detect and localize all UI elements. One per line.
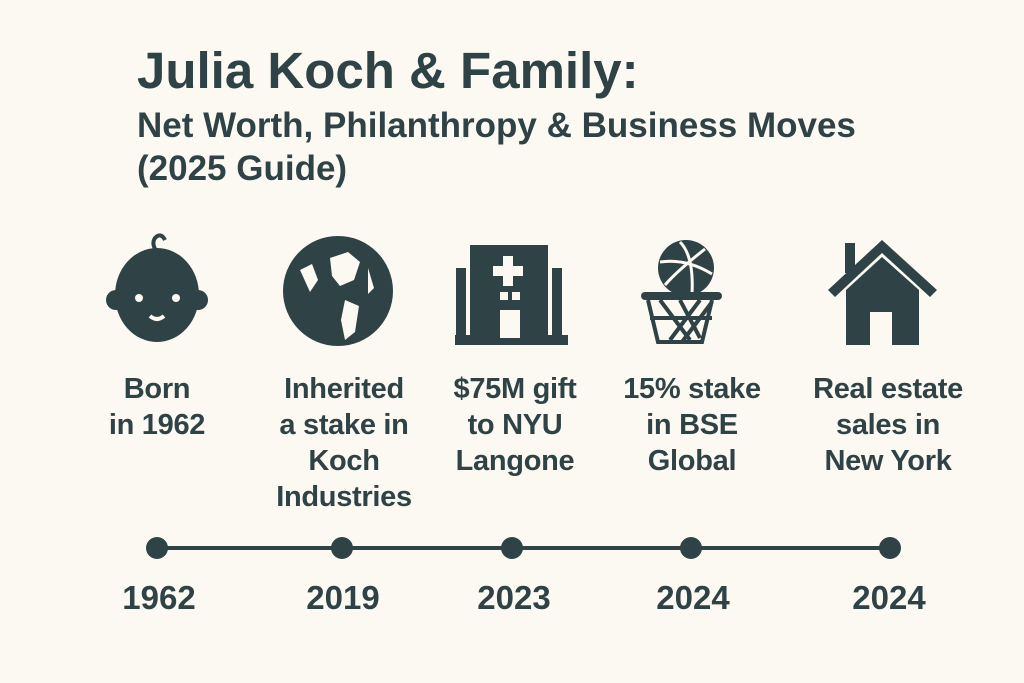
- icon: basketball hoop: [641, 240, 722, 342]
- icon: globe: [283, 236, 393, 346]
- subtitle: Net Worth, Philanthropy & Business Moves: [137, 106, 856, 145]
- year 2023: 2023: [477, 579, 551, 616]
- label: born: in 1962: [109, 409, 205, 441]
- label: real estate: Real estate: [813, 373, 963, 405]
- year 1962: 1962: [122, 579, 196, 616]
- label: inherited: Inherited: [284, 373, 404, 405]
- label: real estate: New York: [824, 445, 952, 477]
- title: Julia Koch & Family:: [137, 42, 639, 99]
- label: BSE: 15% stake: [623, 373, 761, 405]
- year 2019: 2019: [306, 579, 380, 616]
- label: real estate: sales in: [836, 409, 940, 441]
- label: real estate: [813, 373, 963, 477]
- icon: hospital: [455, 245, 568, 345]
- label: BSE: Global: [648, 445, 736, 477]
- icon: house: [828, 240, 937, 345]
- label: gift: $75M gift: [454, 373, 576, 405]
- subtitle: (2025 Guide): [137, 149, 347, 188]
- icon: baby: [106, 235, 208, 342]
- label: gift: to NYU: [468, 409, 562, 441]
- label: BSE: [623, 373, 761, 477]
- year 2024: 2024: [852, 579, 926, 616]
- timeline: [146, 537, 901, 559]
- label: inherited: Koch: [308, 445, 380, 477]
- label: inherited: Industries: [276, 481, 412, 513]
- label: born: [109, 373, 205, 441]
- label: BSE: in BSE: [646, 409, 738, 441]
- label: born: Born: [124, 373, 190, 405]
- subtitle: [137, 106, 856, 188]
- year 2024: 2024: [656, 579, 730, 616]
- label: inherited: [276, 373, 412, 513]
- label: gift: Langone: [456, 445, 574, 477]
- label: inherited: a stake in: [279, 409, 409, 441]
- label: gift: [454, 373, 576, 477]
